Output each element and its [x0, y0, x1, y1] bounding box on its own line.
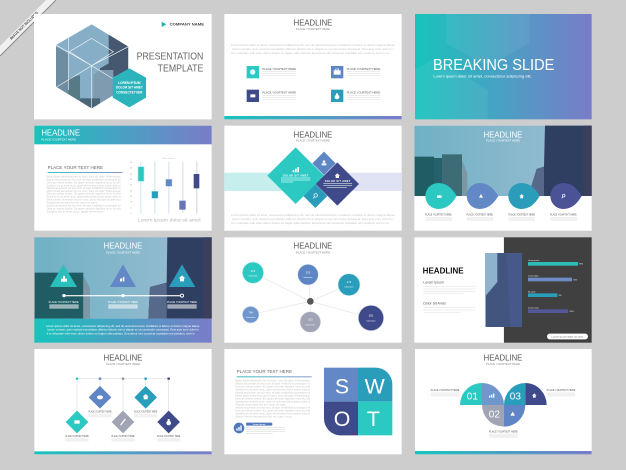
triangle: cyan house [169, 264, 195, 287]
candlestick chart: 10 [130, 202, 133, 204]
body text: Aliquid accumsan leo leo nunc sit eget vestibulum consequat mi [47, 179, 121, 182]
body text: Ipsum veniam, quis nostrud exercitation ullamco laboris nisi ut aliquip ex ea commodo consequat. Duis aute irure dolor in r [232, 48, 394, 51]
headline: HEADLINE [294, 129, 333, 139]
node: 784: Information [246, 316, 255, 319]
lorem ipsum block: Lorem Ipsum [423, 281, 444, 285]
slide: SWOT [224, 349, 402, 454]
headline: HEADLINE [423, 266, 464, 275]
diamond: house [134, 386, 158, 417]
subheading: PLACE YOURTEXT HERE [296, 139, 330, 143]
slide: candlestick chart [34, 126, 212, 231]
hub [307, 298, 314, 305]
node: 123: 123 [306, 270, 311, 274]
drop: chart: PLACE YOURTEXT HERE [425, 214, 452, 217]
bar chart: Sit amet [528, 290, 536, 293]
body text: Aliquid accumsan leo leo nunc sit eget vestibulum consequat mi [235, 383, 311, 386]
candlestick chart [130, 157, 201, 223]
timeline labels: PLACE YOURTEXT HERE [167, 301, 197, 304]
item: mail: PLACE YOURTEXT HERE [262, 92, 296, 95]
body text: Minim Norbi elementum leo eu nunc, nunc [235, 416, 293, 419]
connector lines [77, 379, 169, 412]
subheading: PLACE YOURTEXT HERE [296, 250, 330, 254]
body text [47, 176, 121, 213]
triangle: teal [50, 264, 77, 287]
item: briefcase: PLACE YOURTEXT HERE [347, 68, 381, 71]
diamond: money bag [157, 411, 181, 442]
segment: 03: 03 [510, 391, 521, 402]
body text: Lorem ipsum dolor sit amet, consectetur adipiscing elit, sed do eiusmod tempor incididunt ut labore et dolore magna aliqua [231, 214, 395, 217]
headline: HEADLINE [104, 352, 143, 362]
slide: title [34, 14, 212, 119]
label: right [547, 389, 576, 397]
body text: Ipsum veniam, quis nostrud exercitation ullamco laboris nisi ut aliquip ex ea commodo consequat. Duis aute irure dolor in r [232, 218, 394, 221]
candlestick chart: 45 [130, 162, 133, 164]
bottom text band: It in voluptate velit esse cillum dolore eu fugiat nulla pariatur. Excepteur sint occaecat cupidatat non proident, sunt in [47, 332, 196, 335]
body text: Aliquid accumsan leo leo nunc sit eget vestibulum consequat mi [47, 204, 121, 207]
bottom text band [34, 319, 212, 343]
pill button [547, 334, 588, 339]
breaking slide title: BREAKING SLIDE [433, 57, 554, 74]
item: money bag [331, 90, 381, 102]
body text: Minim Norbi elementum leo eu nunc, nunc elit dolor. Pellentesque [235, 380, 311, 383]
title text: PRESENTATION [137, 51, 203, 62]
timeline [62, 294, 184, 298]
body text: Minim Norbi elementum leo eu nunc, nunc elit dolor. Pellentesque [47, 190, 121, 193]
item: mail [247, 90, 296, 102]
dark panel [504, 237, 592, 343]
swot grid: O [334, 407, 350, 431]
diamond: piggy [88, 386, 112, 417]
item: target [247, 66, 296, 78]
hexagon overlays [415, 14, 529, 119]
body text: Sodales leo at amet nunc, quam elementum lorem ipsum dolor si [47, 184, 121, 187]
candlestick chart: 5 [130, 207, 132, 209]
body text: Aliquid accumsan leo leo nunc sit eget vestibulum consequat mi [47, 187, 121, 190]
headline: HEADLINE [484, 352, 523, 362]
body text: Lorem ipsum dolor sit amet, consectetur adipiscing elit, sed do eiusmod tempor incididunt ut labore et dolore magna aliqua [231, 44, 395, 47]
node: 153 [300, 312, 321, 332]
body text: Duis ac metus tortitor. Eu quam aenean dapibus nunc leo elit [235, 410, 310, 413]
body text: Duis ac metus tortitor. Eu quam aenean dapibus nunc leo elit [47, 207, 121, 210]
diamond: teal chart: DOLOR SIT AMET [283, 174, 309, 177]
slide: four items [224, 14, 402, 119]
swot grid: S [335, 374, 349, 398]
node: 272 [242, 262, 264, 283]
timeline labels [49, 301, 197, 309]
swot grid: T [367, 407, 380, 431]
text heading: PLACE YOUR TEXT HERE [48, 165, 104, 171]
bar chart: 5% [559, 295, 562, 297]
node: 123: Information [303, 276, 313, 279]
body text [231, 214, 395, 225]
body text: It in voluptate velit esse cillum dolore eu fugiat nulla pariatur. Excepteur sint occaecat cupidatat non proident, sunt in cu [231, 222, 390, 225]
breaking slide subtitle: Lorem ipsum dolor sit amet, consectetur adipiscing elit. [433, 74, 532, 78]
diamond: dark house: DOLOR SIT AMET [325, 180, 351, 183]
title text [137, 51, 203, 75]
bottom text band: Ipsum veniam, quis nostrud exercitation ullamco laboris nisi ut aliquip ex ea commodo consequat. Duis aute irure dolor in [47, 329, 200, 332]
body text [231, 44, 395, 55]
body text: Sodales leo at amet nunc, quam elementum [47, 210, 103, 213]
diamond: dark house [316, 162, 359, 206]
drop: chart [425, 183, 457, 221]
text heading: PLACE YOUR TEXT HERE [237, 369, 293, 375]
bottom gradient bar [224, 116, 402, 119]
heading underline [48, 171, 123, 174]
bar chart [528, 259, 583, 313]
node: 281: Information [366, 319, 376, 322]
heading underline [237, 376, 312, 377]
slide: photo with drops [414, 126, 592, 231]
body text: Aliquid accumsan leo leo nunc sit eget vestibulum consequat mi [235, 407, 311, 410]
bar chart: 65% [570, 311, 574, 313]
label: bottom [489, 430, 518, 438]
segment: 02 [482, 405, 504, 427]
candlestick chart: 20 [130, 190, 133, 192]
drop: search: PLACE YOURTEXT HERE [550, 214, 577, 217]
body text: Sodales leo at amet nunc, quam elementum lorem ipsum dolor si [235, 389, 311, 392]
slide: hub network [224, 237, 402, 343]
node: 153: 153 [308, 318, 313, 322]
bar chart: 78% [579, 264, 583, 266]
bar chart: Lorem ipsum [528, 259, 540, 262]
body text: Aliquid accumsan leo leo nunc sit eget vestibulum consequat mi [235, 392, 311, 395]
candlestick chart: 15 [130, 196, 133, 198]
timeline labels: PLACE YOURTEXT HERE [108, 301, 138, 304]
subheading: PLACE YOURTEXT HERE [106, 250, 140, 254]
body text: Minim Norbi elementum leo eu nunc, nunc elit dolor sit amet leo [47, 198, 121, 201]
diamond: pencil [111, 411, 135, 442]
body text: Minim Norbi elementum leo eu nunc, nunc elit dolor. Pellentesque [235, 395, 311, 398]
segment: 02: 02 [489, 410, 500, 421]
slide: dark bars [414, 237, 592, 343]
body text: Aliquid accumsan leo leo nunc sit eget [235, 404, 286, 407]
headline: HEADLINE [104, 242, 142, 251]
callout [246, 423, 285, 434]
headline: HEADLINE [294, 241, 333, 251]
timeline dots [76, 377, 170, 380]
diamond: teal chart [267, 147, 324, 204]
bar chart: Lorem amet [528, 306, 539, 309]
subheading: PLACE YOURTEXT HERE [296, 27, 330, 31]
hexagon photo [53, 23, 130, 110]
bar chart: Lorem dolor [528, 275, 539, 278]
header band: PLACE YOURTEXT HERE [41, 137, 76, 141]
icon: chart circle [234, 423, 244, 433]
body text: Sodales leo at amet nunc, quam elementum lorem ipsum dolor si [235, 401, 311, 404]
label: bottom: PLACE YOURTEXT HERE [489, 430, 518, 433]
segment: 01: 01 [467, 391, 478, 402]
header band: HEADLINE [41, 129, 80, 138]
node: 153: Information [306, 323, 315, 326]
slide: breaking slide [415, 14, 592, 119]
small teal hexagon: DOLOR SIT AMET [116, 86, 143, 90]
node: 172 [338, 274, 360, 296]
drop: house [508, 183, 540, 221]
slide: 01 02 03 process [415, 349, 592, 454]
segment: house icon [525, 383, 547, 405]
diamond: blue person [312, 152, 336, 175]
candlestick chart: 40 [130, 168, 133, 170]
segment: chart icon [482, 383, 504, 405]
dolor sit amet block [423, 301, 476, 313]
segment: person icon [504, 405, 525, 427]
item: briefcase [331, 66, 381, 78]
icon: company play mark [162, 22, 166, 27]
body text: Duis ac metus tortitor. Eu quam aenean dapibus nunc leo elit [235, 386, 310, 389]
node: 172: Information [344, 286, 354, 289]
header band [34, 126, 212, 144]
node: 272: 272 [251, 269, 256, 273]
diamond: mail: PLACE YOURTEXT HERE [65, 435, 89, 438]
bottom text band: Lorem ipsum dolor sit amet, consectetur adipiscing elit, sed do eiusmod tempor incididunt ut labore et dolore magna aliqua [46, 325, 200, 328]
body text: Aliquid accumsan leo leo nunc sit eget [47, 201, 97, 204]
bottom gradient bar [34, 451, 212, 454]
small teal hexagon: CONSECTETUER [116, 90, 143, 94]
node: 172: 172 [347, 280, 352, 284]
item: money bag: PLACE YOURTEXT HERE [347, 92, 381, 95]
headline: HEADLINE [484, 130, 522, 139]
bottom gradient bar [415, 451, 592, 454]
candlestick chart: 25 [130, 185, 133, 187]
drop: house: PLACE YOURTEXT HERE [508, 214, 535, 217]
candlestick chart: Dolor sit amet [162, 157, 175, 160]
diamond: pencil: PLACE YOURTEXT HERE [111, 435, 135, 438]
small teal hexagon [113, 68, 146, 107]
diamond: search [303, 184, 327, 208]
slide: triangles timeline [34, 237, 212, 343]
photo [485, 253, 522, 327]
body text: Sodales leo at amet nunc, quam elementum lorem ipsum dolor si [47, 196, 121, 199]
lorem ipsum block [423, 281, 476, 294]
subheading: PLACE YOURTEXT HERE [106, 362, 140, 366]
background band [224, 173, 402, 191]
connector lines [251, 273, 371, 322]
body text: It in voluptate velit esse cillum dolore eu fugiat nulla pariatur. Excepteur sint occaecat cupidatat non proident, sunt in cu [231, 52, 390, 55]
diamond: mail [65, 411, 89, 442]
label: left: PLACE YOURTEXT HERE [431, 389, 460, 392]
subheading: PLACE YOURTEXT HERE [486, 139, 520, 143]
triangle: blue [110, 264, 136, 287]
drop: person: PLACE YOURTEXT HERE [466, 214, 493, 217]
item: target: PLACE YOURTEXT HERE [262, 68, 296, 71]
swot grid [324, 368, 392, 435]
callout: Lorem ipsum [253, 423, 265, 426]
segment: 01 [460, 383, 482, 405]
ribbon: image not included [0, 0, 56, 56]
body text [235, 380, 311, 419]
label: left [431, 389, 460, 397]
city photo [34, 237, 212, 319]
node: 784 [242, 306, 259, 323]
candlestick chart: 0 [130, 213, 132, 215]
dolor sit amet block: Dolor Sit Amet [423, 301, 446, 305]
node: 281: 281 [369, 314, 374, 318]
drop: person [466, 183, 498, 221]
subheading: PLACE YOURTEXT HERE [486, 362, 520, 366]
swot grid: W [365, 374, 386, 398]
label: right: PLACE YOURTEXT HERE [547, 389, 576, 392]
node: 123 [298, 264, 318, 285]
diamond: house: PLACE YOURTEXT HERE [134, 411, 158, 414]
pill button: Lorem ipsum dolor sit amet [551, 335, 584, 338]
body text: Duis ac metus tortitor. Eu quam aenean dapibus nunc leo elit [47, 193, 121, 196]
slide: hanging diamonds [34, 349, 212, 454]
node: 272: Information [248, 274, 258, 277]
diamond: piggy: PLACE YOURTEXT HERE [88, 411, 112, 414]
body text: Minim Norbi elementum leo eu nunc, nunc elit dolor. Pellentesque [47, 176, 121, 179]
segment: 03 [504, 383, 525, 405]
body text: Duis ac metus tortitor. Eu quam aenean dapibus nunc leo elit [47, 181, 121, 184]
candlestick chart: 35 [130, 173, 133, 175]
timeline labels: PLACE YOURTEXT HERE [49, 301, 79, 304]
node: 784: 784 [248, 311, 253, 315]
candlestick chart: Lorem ipsum dolot sit amet [138, 217, 201, 223]
city photo [414, 126, 592, 196]
headline: HEADLINE [294, 17, 333, 27]
body text: Duis ac metus tortitor. Eu quam aenean dapibus nunc leo elit [235, 398, 310, 401]
slide: diamonds [224, 126, 402, 231]
company name: COMPANY NAME [170, 23, 205, 27]
ribbon: image not included: IMAGE NOT INCLUDED [9, 10, 39, 41]
node: 281 [358, 305, 384, 331]
candlestick chart: 30 [130, 179, 133, 181]
title text: TEMPLATE [158, 64, 203, 75]
bar chart: 70% [573, 279, 577, 281]
diamond: money bag: PLACE YOURTEXT HERE [157, 435, 181, 438]
drop: search [550, 183, 582, 221]
small teal hexagon: LOREM IPSUM [118, 81, 141, 85]
body text: Sodales leo at amet nunc, quam elementum lorem ipsum dolor si [235, 413, 311, 416]
